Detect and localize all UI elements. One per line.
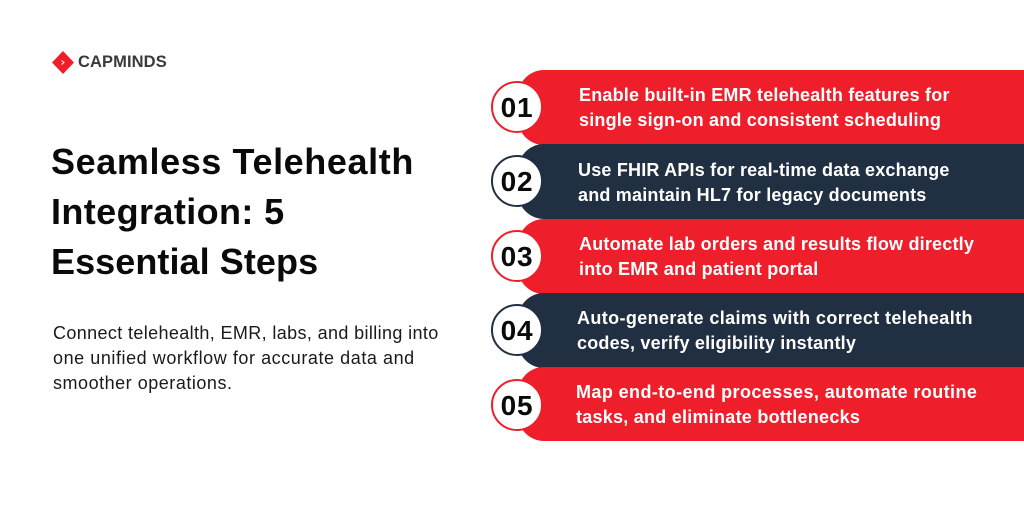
text 03: Automate lab orders and results flow directly	[579, 234, 974, 254]
text 05	[576, 382, 977, 427]
number 03	[491, 230, 543, 282]
text 02: Use FHIR APIs for real-time data exchange	[578, 160, 950, 180]
text 04: Auto-generate claims with correct telehealth	[577, 308, 973, 328]
title: Essential Steps	[51, 241, 318, 282]
text 01: single sign-on and consistent scheduling	[579, 110, 941, 130]
text 01	[579, 85, 950, 130]
step 04	[491, 293, 1024, 368]
bar 01	[518, 70, 1024, 144]
number 01	[491, 81, 543, 133]
number 04	[491, 304, 543, 356]
description text: Connect telehealth, EMR, labs, and billing into	[53, 323, 439, 343]
title	[51, 141, 414, 282]
number 05: 05	[501, 390, 533, 421]
text 05: Map end-to-end processes, automate routine	[576, 382, 977, 402]
description text: one unified workflow for accurate data and	[53, 348, 415, 368]
icon: red diamond	[52, 51, 74, 74]
bar 04	[518, 293, 1024, 368]
title: Seamless Telehealth	[51, 141, 414, 182]
number 03: 03	[501, 241, 533, 272]
number 05	[491, 379, 543, 431]
number 01: 01	[501, 92, 533, 123]
step 01	[491, 70, 1024, 144]
logo wordmark: CAPMINDS	[78, 53, 167, 71]
text 02: and maintain HL7 for legacy documents	[578, 184, 926, 204]
text 02	[578, 160, 950, 205]
description text	[53, 323, 439, 393]
text 05: tasks, and eliminate bottlenecks	[576, 407, 860, 427]
number 04: 04	[501, 315, 533, 346]
title: Integration: 5	[51, 191, 285, 232]
step 05	[491, 367, 1024, 441]
description text: smoother operations.	[53, 373, 232, 393]
bar 03	[518, 219, 1024, 294]
step 03	[491, 219, 1024, 294]
number 02: 02	[501, 166, 533, 197]
text 04	[577, 308, 973, 353]
text 03	[579, 234, 974, 279]
bar 05	[518, 367, 1024, 441]
bar 02	[518, 144, 1024, 218]
text 01: Enable built-in EMR telehealth features for	[579, 85, 950, 105]
logo: Capminds	[52, 51, 167, 74]
text 03: into EMR and patient portal	[579, 258, 818, 278]
number 02	[491, 155, 543, 207]
step 02	[491, 144, 1024, 219]
text 04: codes, verify eligibility instantly	[577, 333, 856, 353]
